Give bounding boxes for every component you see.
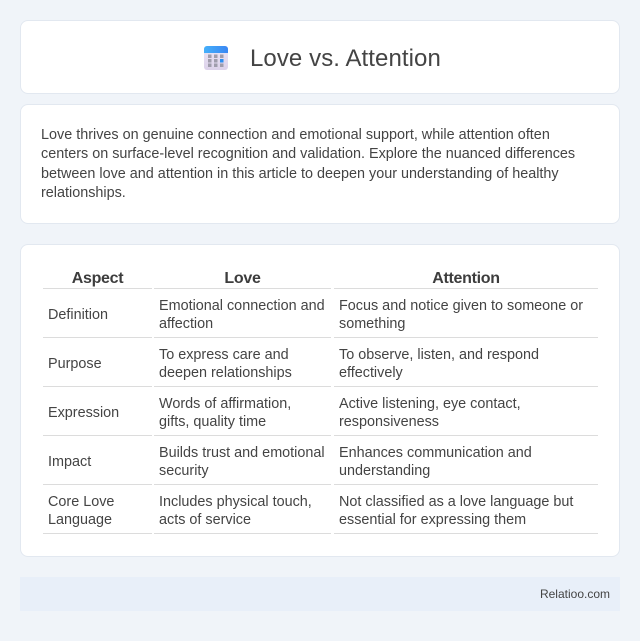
row: Core Love Language: acts of service — [159, 512, 251, 528]
panel: title card — [20, 20, 620, 94]
row: Definition: Emotional connection and — [159, 298, 325, 314]
row: Purpose: Purpose — [48, 356, 102, 372]
row: Core Love Language: Language — [48, 512, 112, 528]
row: Impact: understanding — [339, 463, 430, 479]
intro text — [41, 127, 575, 201]
row: Purpose: To observe, listen, and respond — [339, 347, 539, 363]
row: Core Love Language: essential for expressing them — [339, 512, 526, 528]
intro text: centers on surface-level recognition and validation. Explore the nuanced differences — [41, 146, 575, 162]
row: Expression: responsiveness — [339, 414, 439, 430]
intro text: Love thrives on genuine connection and emotional support, while attention often — [41, 127, 550, 143]
row: Purpose: effectively — [339, 365, 403, 381]
row: Purpose: deepen relationships — [159, 365, 292, 381]
row: Core Love Language: Core Love — [48, 494, 114, 510]
row: Purpose: To express care and — [159, 347, 289, 363]
table header: Aspect — [72, 270, 123, 287]
row: Expression: Active listening, eye contact, — [339, 396, 521, 412]
panel: comparison table — [20, 244, 620, 557]
row: Definition: Definition — [48, 307, 108, 323]
row: Definition: something — [339, 316, 405, 332]
row: Expression — [43, 386, 598, 430]
row: Core Love Language: Includes physical touch, — [159, 494, 312, 510]
icon: calendar — [204, 46, 228, 70]
title: Love vs. Attention — [250, 45, 441, 72]
row: Purpose — [43, 337, 598, 381]
row: Core Love Language: Not classified as a love language but — [339, 494, 573, 510]
footer bar — [20, 577, 620, 611]
row: Impact: Builds trust and emotional — [159, 445, 325, 461]
row: Expression: gifts, quality time — [159, 414, 266, 430]
panel: introduction — [20, 104, 620, 224]
row: Expression: Words of affirmation, — [159, 396, 291, 412]
row: Impact: Impact — [48, 454, 91, 470]
row: Definition: Focus and notice given to someone or — [339, 298, 583, 314]
row: Expression: Expression — [48, 405, 119, 421]
row: Definition: affection — [159, 316, 213, 332]
intro text: between love and attention in this article to deepen your understanding of healthy — [41, 166, 559, 182]
row: Impact — [43, 435, 598, 479]
row: Impact: Enhances communication and — [339, 445, 532, 461]
table header — [72, 270, 500, 287]
table header: Attention — [432, 270, 500, 287]
row: Core Love Language — [43, 484, 598, 534]
footer source text: Relatioo.com — [540, 587, 610, 601]
intro text: relationships. — [41, 185, 126, 201]
row: Definition — [43, 288, 598, 332]
row: Impact: security — [159, 463, 209, 479]
table header: Love — [224, 270, 261, 287]
